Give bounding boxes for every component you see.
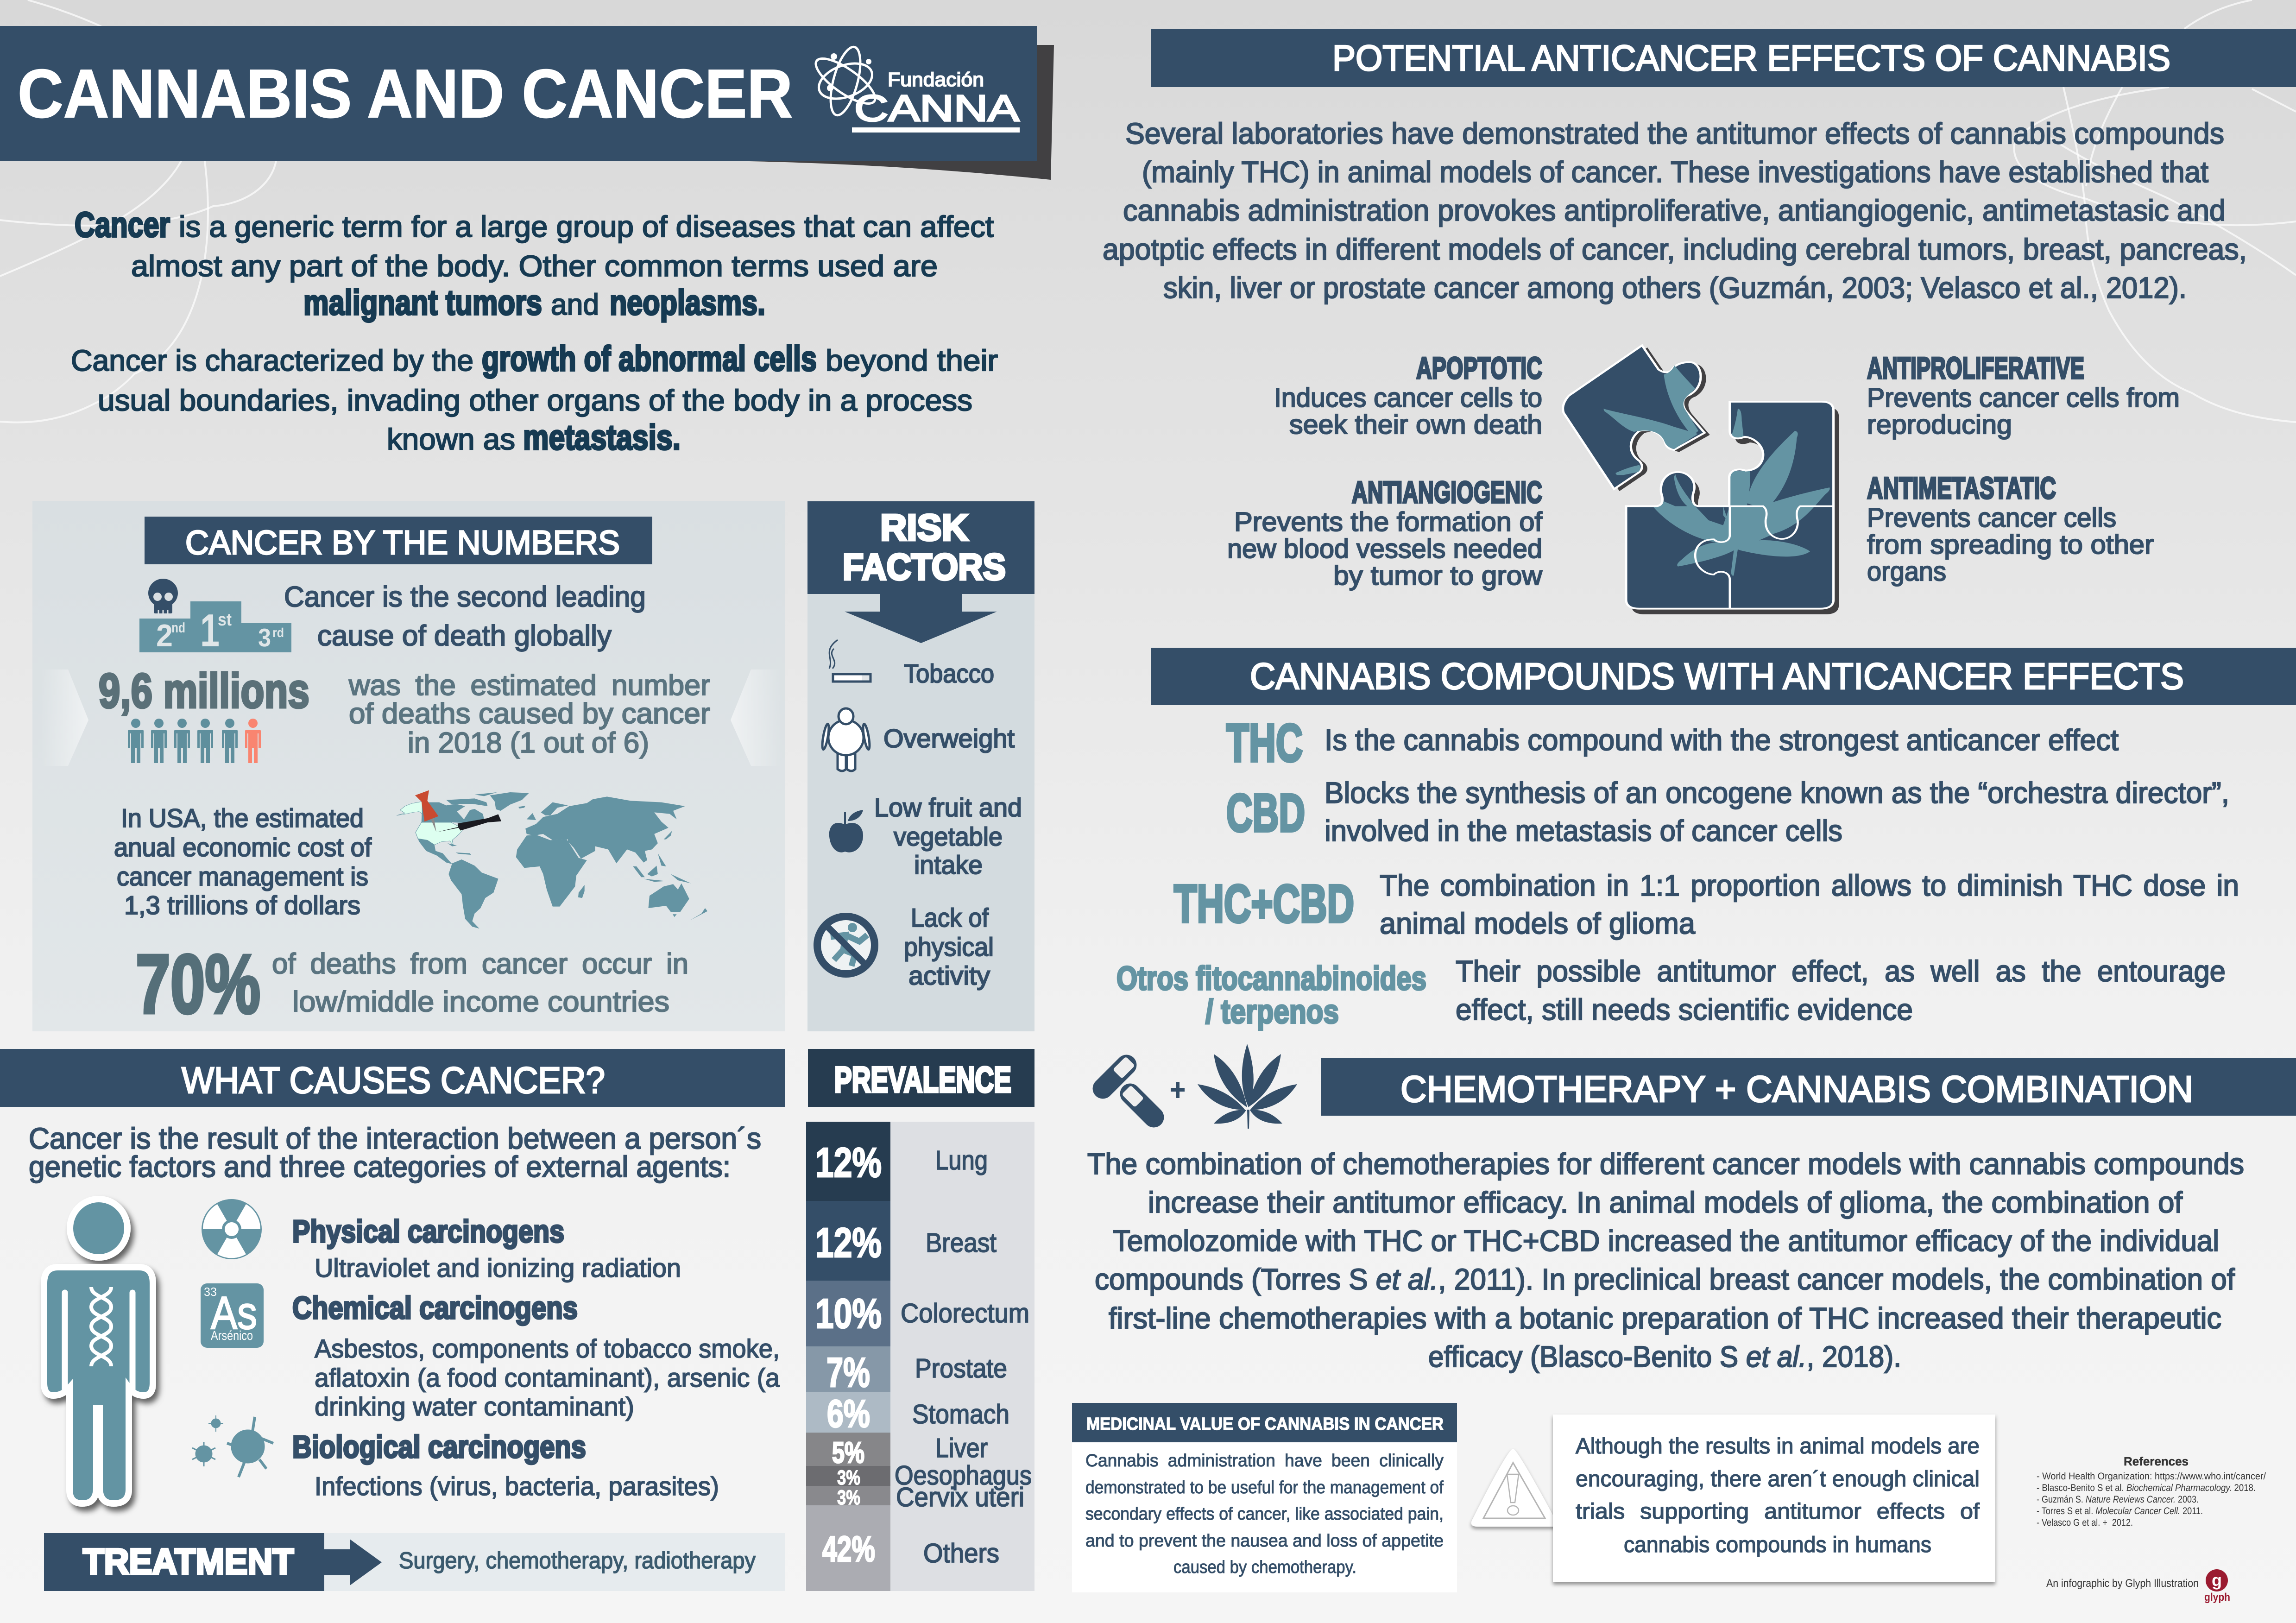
icon: arsenic tile: 33 [204,1285,217,1299]
bar: colorectum 10% [806,1281,1029,1346]
heading: potential anticancer effects [1151,29,2296,87]
header banner: title and logo [0,26,1054,180]
panel: risk factors [807,501,1034,1031]
icon: glyph logo [2204,1569,2230,1604]
text: second leading cause: cause of death globally [317,620,612,652]
references: - Blasco-Benito S et al. Biochemical Pharmacology. 2018. [2037,1483,2256,1493]
text: biological description: Infections (virus, bacteria, parasites) [315,1471,719,1501]
label: antiproliferative: reproducing [1867,410,2012,440]
label: low fruit and vegetable intake [874,793,1022,879]
logo: Fundación CANNA: Fundación [888,69,984,90]
text: estimated deaths [348,669,710,759]
references: References [2124,1454,2189,1468]
intro text block [71,205,998,457]
text: antitumor effects paragraph: Several laboratories have demonstrated the antitumor effects of cannabis compounds [1125,117,2224,150]
icon: warning triangle [1471,1449,1557,1527]
compound: other phytocannabinoids: / terpenos [1205,993,1339,1030]
arrow: risk factors down [845,594,997,643]
heading: cancer by the numbers: CANCER BY THE NUMBERS [185,524,620,562]
intro text block: and [551,288,599,321]
icon: glyph logo: glyph [2204,1591,2230,1604]
label: antiangiogenic: Prevents the formation of [1234,507,1543,537]
icon: podium: st [218,610,232,630]
text: medicinal paragraph: caused by chemotherapy. [1173,1558,1356,1577]
bar: oesophagus 3%: Oesophagus [895,1460,1032,1490]
treatment bar: TREATMENT [83,1541,294,1582]
icon: arsenic tile [201,1283,264,1348]
label: antimetastatic [1867,471,2154,587]
bar: liver 5%: Liver [935,1433,988,1463]
bar: stomach 6%: Stomach [912,1399,1009,1429]
heading: what causes cancer [0,1049,785,1107]
heading: prevalence [808,1049,1034,1107]
icon: cannabis puzzle [1563,346,1839,614]
heading: what causes cancer: WHAT CAUSES CANCER? [182,1060,605,1101]
icon: six people, one highlighted [128,719,261,763]
callout: clinical trials note: trials supporting antitumor effects of [1576,1499,1980,1524]
icon: human body with DNA [44,1199,153,1503]
logo: Fundación CANNA [810,44,1020,133]
compound: CBD: Blocks the synthesis of an oncogene known as the “orchestra director”, [1325,776,2229,809]
text: chemotherapy paragraph: efficacy (Blasco-Benito S et al., 2018). [1428,1340,1901,1373]
callout: clinical trials note: encouraging, there aren´t enough clinical [1576,1467,1980,1491]
text: USA economic cost: cancer management is [117,862,368,891]
text: causes intro: genetic factors and three categories of external agents: [29,1150,731,1183]
label: lack of physical activity: physical [904,932,994,961]
heading: risk factors [843,507,1006,587]
treatment bar [44,1533,785,1591]
text: USA economic cost: In USA, the estimated [121,803,364,833]
bar: colorectum 10%: Colorectum [901,1298,1029,1328]
references: - Velasco G et al. + 2012. [2037,1517,2133,1528]
icon: overweight person [821,708,871,771]
bar: stomach 6%: 6% [827,1392,870,1435]
bar: oesophagus 3% [806,1460,1032,1490]
bar: stomach 6% [806,1392,1009,1435]
text: antitumor effects paragraph: skin, liver or prostate cancer among others (Guzmán, 2003; Velasco et al., 2012). [1163,271,2187,304]
heading: prevalence: PREVALENCE [834,1059,1011,1100]
icon: skull [148,579,178,613]
text: chemotherapy paragraph: The combination of chemotherapies for different cancer models with cannabis compounds [1087,1147,2244,1181]
label: apoptotic: Induces cancer cells to [1274,383,1542,413]
text: medicinal paragraph: Cannabis administration have been clinically [1085,1451,1444,1471]
icon: podium: 3 [258,623,271,652]
compound: other phytocannabinoids: Their possible antitumor effect, as well as the entourage [1456,954,2226,988]
compound: CBD [1226,776,2229,847]
label: antimetastatic: from spreading to other [1867,530,2154,560]
text: chemotherapy paragraph: increase their antitumor efficacy. In animal models of glioma, the combination of [1148,1186,2182,1219]
icon: podium: 2 [156,618,173,653]
intro text block: known as [387,423,515,456]
icon: radiation [202,1199,262,1259]
text: second leading cause [284,581,646,652]
compound: THC+CBD: The combination in 1:1 proportion allows to diminish THC dose in [1380,869,2239,902]
bar: others 42%: 42% [822,1528,875,1569]
label: antiangiogenic: ANTIANGIOGENIC [1352,475,1542,509]
text: USA economic cost [114,803,372,920]
label: antiangiogenic: new blood vessels needed [1227,534,1542,564]
text: antitumor effects paragraph: apotptic effects in different models of cancer, including cerebral tumors, breast, pancreas, [1103,233,2247,266]
chart: prevalence stacked bar [806,1122,1034,1591]
label: antiangiogenic [1227,475,1543,591]
label: antimetastatic: Prevents cancer cells [1867,503,2116,533]
icon: apple [829,810,863,853]
text: medicinal paragraph: and to prevent the nausea and loss of appetite [1085,1531,1444,1551]
label: apoptotic [1274,351,1542,440]
heading: potential anticancer effects: POTENTIAL ANTICANCER EFFECTS OF CANNABIS [1332,38,2170,78]
label: overweight: Overweight [883,724,1015,753]
references [2037,1454,2266,1528]
label: antimetastatic: ANTIMETASTATIC [1867,471,2056,505]
bar: breast 12%: Breast [926,1228,997,1258]
intro text block: malignant tumors [303,283,542,322]
text: estimated deaths: was the estimated number [348,669,710,701]
callout: clinical trials note [1553,1415,1995,1582]
label: lack of physical activity: Lack of [911,903,989,932]
icon: podium [139,601,291,657]
text: USA economic cost: 1,3 trillions of dollars [124,890,360,920]
puzzle: detached piece [1563,346,1710,491]
text: physical description: Ultraviolet and ionizing radiation [315,1253,681,1282]
logo: Fundación CANNA: CANNA [854,88,1020,129]
bar: others 42%: Others [923,1538,999,1568]
callout: clinical trials note: Although the results in animal models are [1576,1434,1980,1459]
label: low fruit and vegetable intake: Low fruit and [874,793,1022,822]
bar: liver 5%: 5% [832,1436,864,1469]
bar: breast 12%: 12% [815,1220,882,1266]
text: chemical description: Asbestos, components of tobacco smoke, [315,1334,780,1363]
text: chemical description [315,1334,780,1421]
references: - Guzmán S. Nature Reviews Cancer. 2003. [2037,1494,2199,1505]
text: chemotherapy paragraph: Temolozomide with THC or THC+CBD increased the antitumor efficacy of the individual [1113,1224,2219,1257]
bar: prostate 7%: 7% [826,1350,870,1396]
credit: glyph illustration [2046,1569,2230,1604]
label: low fruit and vegetable intake: vegetable [894,822,1003,851]
text: 70% low/middle income: of deaths from cancer occur in [272,948,688,980]
panel: medicinal value: MEDICINAL VALUE OF CANNABIS IN CANCER [1086,1415,1444,1434]
label: low fruit and vegetable intake: intake [914,850,983,879]
heading: chemotherapy + cannabis [1321,1058,2296,1116]
text: chemotherapy paragraph: first-line chemotherapies with a botanic preparation of THC increased their therapeutic [1109,1301,2221,1335]
heading: chemical carcinogens: Chemical carcinogens [292,1290,578,1326]
text: 70% low/middle income [272,948,688,1018]
bar: cervix uteri 3%: Cervix uteri [896,1482,1024,1512]
arrow: treatment [324,1539,382,1585]
bar: cervix uteri 3%: 3% [837,1486,860,1509]
puzzle: assembled pieces [1626,402,1839,614]
icon: no physical activity [817,916,875,974]
panel: medicinal value [1072,1403,1457,1592]
label: antiproliferative: Prevents cancer cells from [1867,383,2180,413]
intro text block: Cancer is characterized by the [71,344,473,377]
heading: chemotherapy + cannabis: CHEMOTHERAPY + CANNABIS COMBINATION [1400,1068,2193,1110]
text: causes intro [29,1122,761,1183]
heading: risk factors: RISK [880,507,968,548]
chevron decoration left [41,669,88,766]
icon: arsenic tile: As [211,1287,257,1339]
callout: clinical trials note: cannabis compounds in humans [1624,1533,1931,1557]
text: chemical description: drinking water contaminant) [315,1392,634,1421]
text: 70% low/middle income: low/middle income countries [292,986,669,1018]
compound: CBD: CBD [1226,783,1305,843]
heading: cannabis compounds: CANNABIS COMPOUNDS WITH ANTICANCER EFFECTS [1250,656,2184,697]
label: apoptotic: APOPTOTIC [1416,351,1542,385]
label: antiproliferative: ANTIPROLIFERATIVE [1867,351,2084,385]
icon: podium: rd [272,625,284,640]
heading: risk factors: FACTORS [843,546,1006,587]
references: - World Health Organization: https://www.who.int/cancer/ [2037,1471,2266,1482]
chart: world map with pin on USA [397,790,707,928]
references: - Torres S et al. Molecular Cancer Cell. 2011. [2037,1506,2203,1516]
intro text block: almost any part of the body. Other common terms used are [131,249,938,283]
icon: viruses [192,1415,273,1477]
compound: other phytocannabinoids [1116,954,2226,1030]
label: lack of physical activity: activity [908,961,990,990]
bar: lung 12% [806,1122,988,1201]
compound: THC+CBD [1174,869,2239,940]
compound: CBD: involved in the metastasis of cancer cells [1325,814,1842,847]
label: lack of physical activity [904,903,994,990]
label: antiproliferative [1867,351,2180,440]
bar: prostate 7% [806,1346,1007,1396]
bar: lung 12%: 12% [815,1140,882,1186]
bar: liver 5% [806,1433,988,1469]
label: antimetastatic: organs [1867,556,1946,587]
intro text block: neoplasms. [610,283,765,322]
label: antiangiogenic: by tumor to grow [1333,561,1543,591]
bar: others 42% [806,1505,999,1591]
text: medicinal paragraph: demonstrated to be useful for the management of [1085,1478,1444,1497]
heading: physical carcinogens: Physical carcinogens [292,1214,564,1249]
label: tobacco: Tobacco [904,659,994,688]
bar: oesophagus 3%: 3% [837,1466,860,1489]
stat: 9,6 millions: 9,6 millions [99,664,309,718]
intro text block: Cancer [75,205,170,245]
text: estimated deaths: of deaths caused by cancer [349,698,710,730]
compound: THC+CBD: animal models of glioma [1380,907,1695,940]
text: estimated deaths: in 2018 (1 out of 6) [408,727,649,759]
bar: breast 12% [806,1201,997,1281]
chevron decoration right [731,669,782,766]
icon: pills plus leaf [1088,1044,1297,1132]
text: chemotherapy paragraph [1087,1147,2244,1373]
compound: THC [1226,714,2119,773]
panel: cancer by the numbers [32,501,785,1031]
text: chemical description: aflatoxin (a food contaminant), arsenic (a [315,1363,780,1392]
icon: podium: 1 [200,605,220,657]
intro text block: beyond their [826,344,998,377]
compound: THC: THC [1226,714,1303,773]
text: second leading cause: Cancer is the second leading [284,581,646,613]
intro text block: is a generic term for a large group of diseases that can affect [179,210,994,243]
icon: arsenic tile: Arsénico [211,1328,253,1343]
compound: THC+CBD: THC+CBD [1174,874,1354,934]
intro text block: metastasis. [523,418,681,457]
bar: lung 12%: Lung [935,1145,988,1175]
icon: podium: nd [171,620,185,636]
icon: cigarette [829,640,870,682]
bar: cervix uteri 3% [806,1482,1024,1512]
text: medicinal paragraph: secondary effects of cancer, like associated pain, [1085,1504,1444,1524]
stat: 70%: 70% [136,938,260,1031]
text: medicinal paragraph [1085,1451,1444,1577]
text: antitumor effects paragraph: (mainly THC) in animal models of cancer. These investigations have established that [1142,155,2208,189]
heading: cannabis compounds [1151,648,2296,705]
icon: glyph logo: g [2212,1571,2222,1590]
compound: other phytocannabinoids: effect, still needs scientific evidence [1456,993,1913,1026]
text: antitumor effects paragraph: cannabis administration provokes antiproliferative, antiangiogenic, antimetastasic and [1123,194,2226,227]
intro text block: usual boundaries, invading other organs of the body in a process [98,384,972,417]
heading: biological carcinogens: Biological carcinogens [292,1429,586,1465]
label: apoptotic: seek their own death [1289,410,1542,440]
intro text block: growth of abnormal cells [482,339,817,379]
bar: prostate 7%: Prostate [915,1353,1007,1383]
text: treatment options: Surgery, chemotherapy, radiotherapy [399,1547,756,1573]
compound: other phytocannabinoids: Otros fitocannabinoides [1116,960,1426,997]
title: CANNABIS AND CANCER [18,56,793,132]
compound: THC: Is the cannabis compound with the strongest anticancer effect [1325,723,2119,757]
text: chemotherapy paragraph: compounds (Torres S et al., 2011). In preclinical breast cancer models, the combination of [1095,1263,2235,1296]
text: causes intro: Cancer is the result of the interaction between a person´s [29,1122,761,1155]
credit: glyph illustration: An infographic by Glyph Illustration [2046,1577,2199,1590]
heading: cancer by the numbers [145,517,652,564]
text: USA economic cost: anual economic cost of [114,833,372,862]
text: antitumor effects paragraph [1103,117,2247,304]
bar: colorectum 10%: 10% [815,1291,882,1337]
